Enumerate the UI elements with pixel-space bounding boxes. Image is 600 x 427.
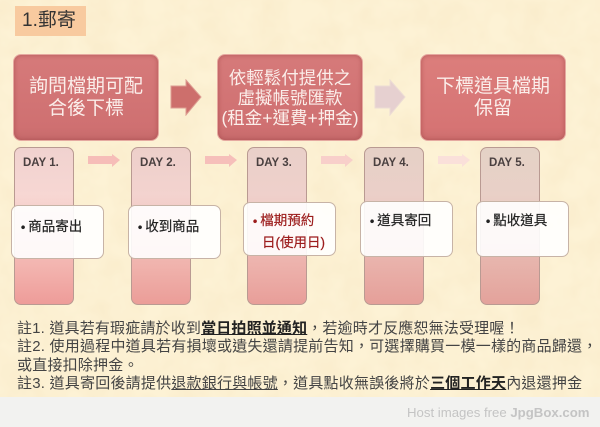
card: day 2: •收到商品 xyxy=(138,219,199,234)
notes xyxy=(17,320,597,392)
day column 5 xyxy=(480,147,540,305)
note 1: 註1. 道具若有瑕疵請於收到當日拍照並通知，若逾時才反應恕無法受理喔！ xyxy=(17,320,520,337)
day column 4 xyxy=(364,147,424,305)
card: day 2 xyxy=(128,205,221,259)
day column 3: DAY 3. xyxy=(256,157,292,169)
day column 1: DAY 1. xyxy=(23,157,59,169)
step box: inquiry: 合後下標 xyxy=(48,98,124,118)
step box: payment: (租金+運費+押金) xyxy=(221,108,359,128)
card: day 5 xyxy=(476,201,569,257)
small arrow 4 xyxy=(438,154,470,167)
step box: inquiry xyxy=(13,54,159,141)
card: day 5: •點收道具 xyxy=(486,213,547,228)
step box: reserved: 下標道具檔期 xyxy=(436,76,550,96)
day column 1 xyxy=(14,147,74,305)
card: day 4: •道具寄回 xyxy=(370,213,431,228)
note 2: 註2. 使用過程中道具若有損壞或遺失還請提前告知，可選擇購買一模一樣的商品歸還， xyxy=(17,338,597,355)
footer watermark: Host images free JpgBox.com xyxy=(407,405,589,420)
note 3: 註3. 道具寄回後請提供退款銀行與帳號，道具點收無誤後將於三個工作天內退還押金 xyxy=(17,375,582,392)
day column 3 xyxy=(247,147,307,305)
card: day 4 xyxy=(360,201,453,257)
card: day 3: 日(使用日) xyxy=(262,235,325,250)
title xyxy=(15,6,86,36)
day column 2: DAY 2. xyxy=(140,157,176,169)
card: day 1 xyxy=(11,205,104,259)
day column 2 xyxy=(131,147,191,305)
step box: payment: 依輕鬆付提供之 xyxy=(229,68,351,88)
small arrow 2 xyxy=(205,154,237,167)
note 2 continued: 或直接扣除押金。 xyxy=(17,357,139,374)
day column 4: DAY 4. xyxy=(373,157,409,169)
step box: payment xyxy=(217,54,363,141)
small arrow 3 xyxy=(321,154,353,167)
arrow: step 1 to 2 xyxy=(170,79,202,116)
small arrow 1 xyxy=(88,154,120,167)
card: day 1: •商品寄出 xyxy=(21,219,82,234)
step box: payment: 虛擬帳號匯款 xyxy=(237,88,342,108)
card: day 3 xyxy=(243,202,336,256)
day column 5: DAY 5. xyxy=(489,157,525,169)
title: 1.郵寄 xyxy=(22,10,76,31)
arrow: step 2 to 3 xyxy=(374,79,406,116)
card: day 3: •檔期預約 xyxy=(253,213,314,228)
step box: reserved: 保留 xyxy=(474,98,512,118)
step box: reserved xyxy=(420,54,566,141)
step box: inquiry: 詢問檔期可配 xyxy=(29,76,143,96)
